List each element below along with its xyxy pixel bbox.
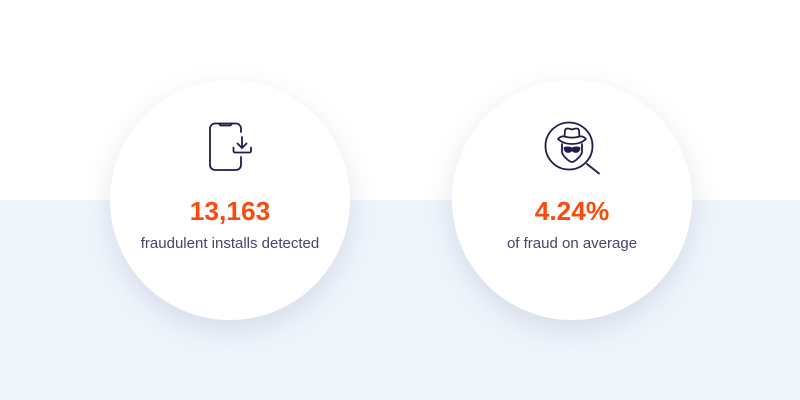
- statistic: 13,163: 13,163: [190, 196, 270, 226]
- background band: [0, 200, 800, 400]
- panel: fraudulent installs: [110, 80, 350, 320]
- panel: fraud average: [452, 80, 692, 320]
- icon: phone download: [209, 122, 252, 171]
- label: fraudulent installs detected: fraudulent installs detected: [141, 235, 319, 252]
- label: of fraud on average: of fraud on average: [507, 235, 637, 252]
- icon: spy in magnifying glass: [544, 122, 600, 174]
- statistic: 4.24%: 4.24%: [535, 196, 609, 226]
